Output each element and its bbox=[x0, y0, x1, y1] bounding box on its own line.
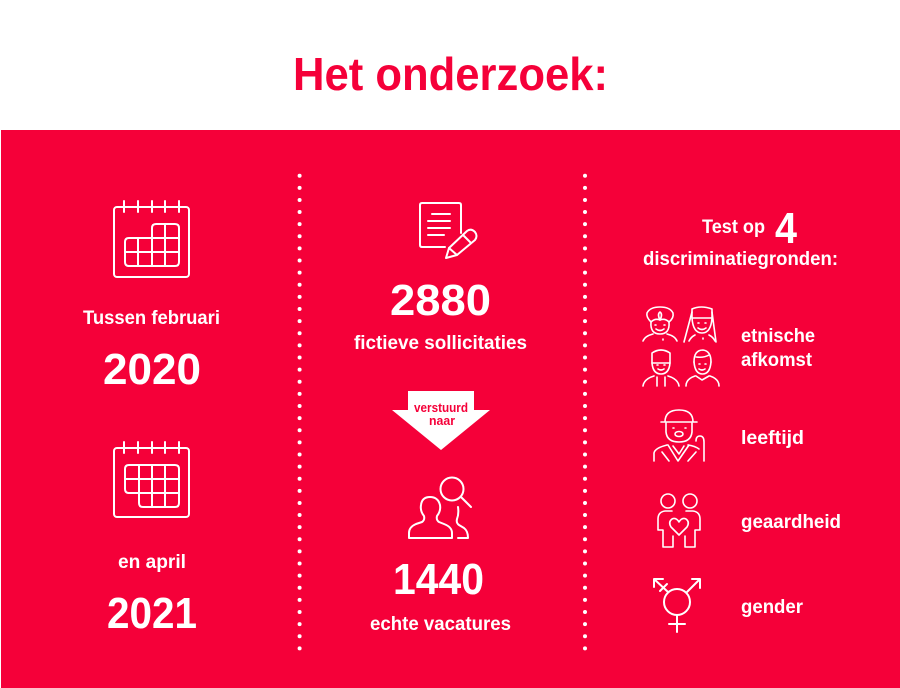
icon: elderly person with cane bbox=[654, 410, 704, 461]
label: gender: gender bbox=[741, 597, 804, 618]
label: sexual orientation: geaardheid bbox=[741, 512, 841, 533]
icon: couple with heart bbox=[658, 494, 700, 547]
icon: document with pencil bbox=[420, 203, 476, 258]
icon: transgender symbol bbox=[654, 579, 700, 632]
panel: applications bbox=[354, 203, 527, 635]
heading: test on 4 grounds bbox=[643, 204, 838, 270]
arrow: sent to: verstuurd bbox=[414, 401, 468, 415]
arrow: sent to: naar bbox=[429, 414, 455, 428]
label: age: leeftijd bbox=[741, 428, 804, 449]
heading: test on 4 grounds: 4 bbox=[775, 204, 797, 253]
arrow: sent to bbox=[392, 391, 490, 450]
vacancies label: echte vacatures bbox=[370, 614, 511, 635]
applications label: fictieve sollicitaties bbox=[354, 333, 527, 354]
title: Het onderzoek: bbox=[293, 48, 608, 100]
year 2020: 2020 bbox=[103, 345, 201, 394]
period start label: Tussen februari bbox=[83, 308, 220, 329]
number of applications: 2880 bbox=[390, 276, 491, 325]
icon: calendar 2021 bbox=[114, 442, 189, 517]
heading: test on 4 grounds: Test op bbox=[702, 217, 765, 238]
heading: test on 4 grounds: discriminatiegronden: bbox=[643, 249, 838, 270]
panel: period bbox=[83, 201, 220, 638]
panel: discrimination grounds bbox=[643, 204, 841, 632]
year 2021: 2021 bbox=[107, 589, 197, 638]
icon: calendar 2020 bbox=[114, 201, 189, 277]
period end label: en april bbox=[118, 552, 186, 573]
icon: people with magnifier bbox=[409, 478, 471, 538]
number of vacancies: 1440 bbox=[393, 555, 484, 604]
label: ethnic origin: etnische bbox=[741, 326, 815, 347]
icon: four people of ethnic origins bbox=[643, 307, 719, 386]
label: ethnic origin: afkomst bbox=[741, 350, 813, 371]
label: ethnic origin bbox=[741, 326, 815, 371]
